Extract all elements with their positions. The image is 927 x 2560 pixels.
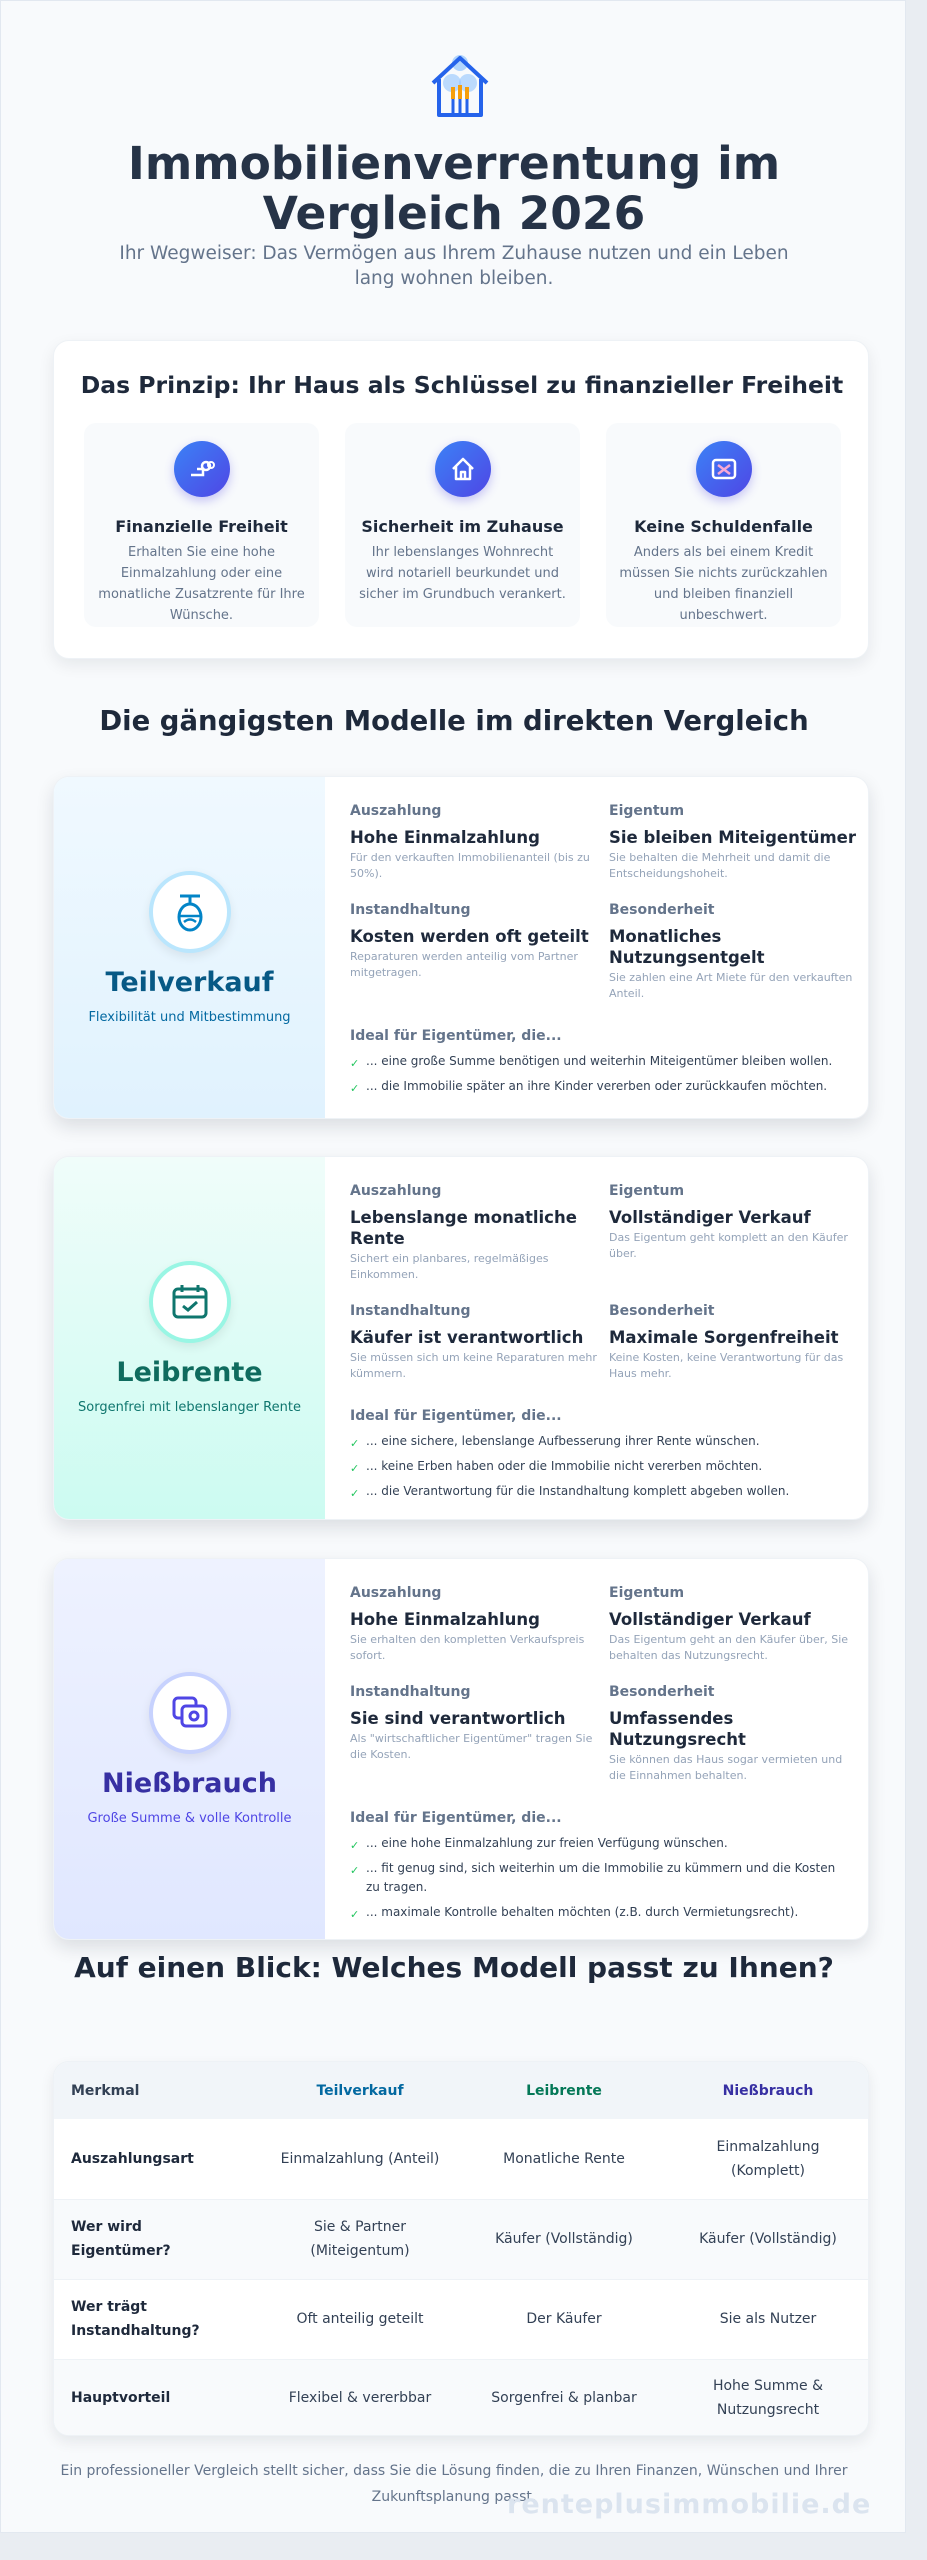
details: Teilverkauf: Sie behalten die Mehrheit und damit die Entscheidungshoheit. [609,851,830,880]
details: Teilverkauf: ✓ [350,1082,359,1095]
table: comparison: Einmalzahlung (Anteil) [281,2151,439,2167]
left: Nießbrauch [54,1559,325,1939]
details: Teilverkauf: ✓ [350,1057,359,1070]
table: comparison: Merkmal [71,2082,139,2098]
card: Sicherheit im Zuhause: Sicherheit im Zuhause [361,517,564,536]
details: Leibrente: ✓ [350,1462,359,1475]
footer text: Ein professioneller Vergleich stellt sicher, dass Sie die Lösung finden, die zu Ihren Finanzen, Wünschen und Ihrer Zukunftsplanung passt. [60,2463,848,2505]
details: Leibrente: Käufer ist verantwortlich [350,1328,583,1347]
table: comparison: Der Käufer [526,2311,602,2327]
table: comparison: Eigentümer? [71,2243,171,2259]
details: Nießbrauch: ✓ [350,1839,359,1852]
table: comparison: Käufer (Vollständig) [495,2231,633,2247]
details: Leibrente: Ideal für Eigentümer, die... [350,1408,562,1424]
details: Nießbrauch: ... maximale Kontrolle behalten möchten (z.B. durch Vermietungsrecht). [366,1905,798,1919]
heading: Das Prinzip: Das Prinzip: Ihr Haus als Schlüssel zu finanzieller Freiheit [81,371,843,399]
details: Leibrente: Eigentum [609,1183,684,1199]
details: Nießbrauch: Das Eigentum geht an den Käufer über, Sie behalten das Nutzungsrecht. [609,1633,848,1662]
table: comparison: Nutzungsrecht [717,2402,819,2418]
table: comparison: Wer wird [71,2219,142,2235]
details: Teilverkauf: Instandhaltung [350,902,470,918]
heading: Auf einen Blick: Auf einen Blick: Welches Modell passt zu Ihnen? [74,1951,834,1984]
details: Leibrente: Lebenslange monatliche Rente [350,1208,577,1248]
table: comparison: Käufer (Vollständig) [699,2231,837,2247]
card: Sicherheit im Zuhause: Ihr lebenslanges Wohnrecht wird notariell beurkundet und sicher im Grundbuch verankert. [359,545,566,602]
details: Teilverkauf: Hohe Einmalzahlung [350,828,540,847]
details: Teilverkauf: Monatliches Nutzungsentgelt [609,927,765,967]
details: Teilverkauf: Auszahlung [350,803,441,819]
details: Teilverkauf [350,803,856,1095]
card: Sicherheit im Zuhause [345,423,580,627]
details: Teilverkauf: Reparaturen werden anteilig vom Partner mitgetragen. [350,950,578,979]
details: Leibrente: Auszahlung [350,1183,441,1199]
details: Leibrente: Maximale Sorgenfreiheit [609,1328,839,1347]
table: comparison: Teilverkauf [316,2082,404,2098]
table: comparison: Instandhaltung? [71,2323,200,2339]
details: Nießbrauch: Als "wirtschaftlicher Eigentümer" tragen Sie die Kosten. [350,1732,592,1761]
left: Nießbrauch: Nießbrauch [102,1768,277,1799]
details: Teilverkauf: Ideal für Eigentümer, die... [350,1028,562,1044]
details: Nießbrauch: ✓ [350,1864,359,1877]
details: Leibrente: Keine Kosten, keine Verantwortung für das Haus mehr. [609,1351,843,1380]
details: Nießbrauch: Ideal für Eigentümer, die... [350,1810,562,1826]
table: comparison: Sie & Partner [314,2219,406,2235]
details: Nießbrauch: Hohe Einmalzahlung [350,1610,540,1629]
left: Leibrente [54,1157,325,1519]
table: comparison: Leibrente [526,2082,602,2098]
left: Leibrente: Sorgenfrei mit lebenslanger Rente [78,1400,301,1415]
details: Leibrente: ... keine Erben haben oder die Immobilie nicht vererben möchten. [366,1459,762,1473]
table: comparison: Auszahlungsart [71,2151,194,2167]
details: Leibrente: Vollständiger Verkauf [609,1208,811,1227]
panel: Nießbrauch [53,1558,869,1940]
details: Nießbrauch: Sie erhalten den kompletten Verkaufspreis sofort. [350,1633,584,1662]
table: comparison [53,2061,869,2436]
details: Leibrente: Instandhaltung [350,1303,470,1319]
card: Keine Schuldenfalle: Keine Schuldenfalle [634,517,813,536]
table: comparison: Sie als Nutzer [720,2311,816,2327]
table: comparison: Einmalzahlung [716,2139,820,2155]
details: Nießbrauch: ... fit genug sind, sich weiterhin um die Immobilie zu kümmern und die Kosten zu tragen. [366,1861,835,1894]
details: Teilverkauf: Besonderheit [609,902,714,918]
details: Nießbrauch [350,1585,848,1921]
details: Nießbrauch: Besonderheit [609,1684,714,1700]
details: Leibrente: ... eine sichere, lebenslange Aufbesserung ihrer Rente wünschen. [366,1434,760,1448]
details: Leibrente: ✓ [350,1437,359,1450]
details: Teilverkauf: Kosten werden oft geteilt [350,927,589,946]
details: Leibrente: Sichert ein planbares, regelmäßiges Einkommen. [350,1252,548,1281]
left: Teilverkauf: Flexibilität und Mitbestimmung [88,1010,291,1024]
card: Finanzielle Freiheit: Erhalten Sie eine hohe Einmalzahlung oder eine monatliche Zusatzrente für Ihre Wünsche. [98,545,305,623]
left: Teilverkauf: Teilverkauf [105,966,274,998]
panel: Leibrente [53,1156,869,1520]
details: Leibrente: Sie müssen sich um keine Reparaturen mehr kümmern. [350,1351,597,1380]
heading: Modelle: Die gängigsten Modelle im direkten Vergleich [99,705,809,737]
details: Leibrente [350,1183,848,1500]
details: Teilverkauf: Eigentum [609,803,684,819]
details: Leibrente: ✓ [350,1487,359,1500]
table: comparison: (Komplett) [731,2163,805,2179]
details: Leibrente: Das Eigentum geht komplett an den Käufer über. [609,1231,848,1260]
details: Nießbrauch: ✓ [350,1908,359,1921]
left: Teilverkauf [54,777,325,1118]
panel: Das Prinzip [53,340,869,659]
title: Vergleich 2026 [263,187,645,240]
table: comparison: (Miteigentum) [310,2243,410,2259]
details: Teilverkauf: ... eine große Summe benötigen und weiterhin Miteigentümer bleiben wollen. [366,1054,832,1068]
card: Finanzielle Freiheit: Finanzielle Freiheit [115,517,288,536]
details: Nießbrauch: Vollständiger Verkauf [609,1610,811,1629]
details: Nießbrauch: Auszahlung [350,1585,441,1601]
title [128,137,780,240]
icon: house logo [432,55,488,117]
table: comparison: Nießbrauch [723,2082,813,2098]
table: comparison: Hohe Summe & [713,2378,823,2394]
card: Keine Schuldenfalle [606,423,841,627]
details: Nießbrauch: Instandhaltung [350,1684,470,1700]
details: Leibrente: Besonderheit [609,1303,714,1319]
panel: Teilverkauf [53,776,869,1119]
details: Nießbrauch: Umfassendes Nutzungsrecht [609,1709,746,1749]
details: Nießbrauch: ... eine hohe Einmalzahlung zur freien Verfügung wünschen. [366,1836,728,1850]
details: Teilverkauf: Sie zahlen eine Art Miete für den verkauften Anteil. [609,971,852,1000]
details: Nießbrauch: Sie sind verantwortlich [350,1709,566,1728]
details: Leibrente: ... die Verantwortung für die Instandhaltung komplett abgeben wollen. [366,1484,789,1498]
table: comparison: Wer trägt [71,2299,147,2315]
table: comparison: Oft anteilig geteilt [296,2311,424,2327]
table: comparison: Sorgenfrei & planbar [491,2390,637,2406]
table: comparison: Flexibel & vererbbar [289,2390,431,2406]
table: comparison: Monatliche Rente [503,2151,625,2167]
card: Keine Schuldenfalle: Anders als bei einem Kredit müssen Sie nichts zurückzahlen und bleiben finanziell unbeschwert. [619,545,828,623]
left: Leibrente: Leibrente [116,1357,263,1388]
details: Teilverkauf: ... die Immobilie später an ihre Kinder vererben oder zurückkaufen möchten. [366,1079,827,1093]
left: Nießbrauch: Große Summe & volle Kontrolle [87,1811,292,1826]
details: Nießbrauch: Sie können das Haus sogar vermieten und die Einnahmen behalten. [609,1753,842,1782]
subtitle: Ihr Wegweiser: Das Vermögen aus Ihrem Zuhause nutzen und ein Leben lang wohnen bleiben. [119,243,789,289]
table: comparison: Hauptvorteil [71,2390,170,2406]
details: Teilverkauf: Für den verkauften Immobilienanteil (bis zu 50%). [350,851,590,880]
title: Immobilienverrentung im [128,137,780,190]
card: Finanzielle Freiheit [84,423,319,627]
watermark: renteplusimmobilie.de [507,2489,871,2520]
details: Teilverkauf: Sie bleiben Miteigentümer [609,828,856,847]
details: Nießbrauch: Eigentum [609,1585,684,1601]
